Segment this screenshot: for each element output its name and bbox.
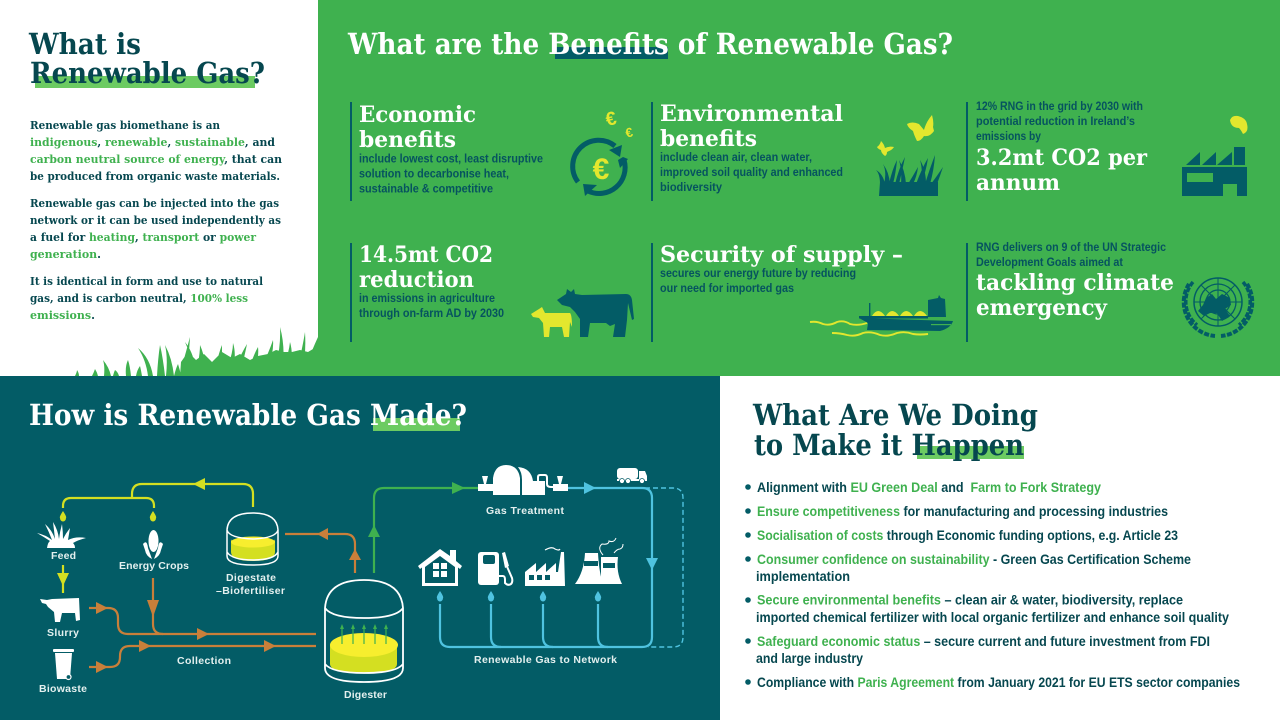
benefit: grid emissions: 12% RNG in the grid by 2030 with (976, 99, 1143, 113)
list: actions (745, 480, 1240, 690)
text block: definition: be produced from organic waste materials. (30, 169, 280, 183)
icon: euro cycle (573, 108, 634, 196)
text block: definition: generation. (30, 247, 101, 261)
list: actions: Safeguard economic status – secure current and future investment from FDI (757, 634, 1210, 649)
heading: what is renewable gas (28, 27, 265, 90)
icon: slurry cow (40, 598, 80, 622)
label: collection: Collection (177, 655, 231, 667)
icon: fuel pump (478, 552, 512, 585)
benefit: economic (350, 102, 543, 201)
icon: digestate tank (227, 513, 278, 565)
icon: grass (75, 327, 318, 376)
text block: definition: gas, and is carbon neutral, 100% less (30, 291, 248, 305)
label: slurry: Slurry (47, 627, 79, 639)
list: actions: Socialisation of costs through Economic funding options, e.g. Article 23 (757, 528, 1178, 543)
text block: definition: indigenous, renewable, sustainable, and (30, 135, 275, 149)
arrows: blue renewable gas network (437, 482, 683, 647)
icon: euro cycle: € (624, 124, 634, 141)
benefit: security of supply: Security of supply – (660, 242, 903, 268)
icon: house (418, 549, 462, 586)
icon: gas tanker truck (617, 468, 647, 484)
benefit: climate emergency: Development Goals aimed at (976, 255, 1123, 269)
label: digester: Digester (344, 689, 387, 701)
label: digestate biofertiliser: Digestate (226, 572, 276, 584)
heading: benefits: What are the Benefits of Renewable Gas? (347, 27, 953, 61)
panel: what are we doing (745, 398, 1240, 690)
benefit: agriculture reduction: in emissions in agriculture (359, 291, 495, 305)
list: actions: Compliance with Paris Agreement from January 2021 for EU ETS sector companies (757, 675, 1240, 690)
label: digestate biofertiliser (216, 572, 285, 597)
icon: feed grass (37, 522, 86, 548)
list: actions: Ensure competitiveness for manufacturing and processing industries (757, 504, 1168, 519)
benefit: economic: Economic (359, 102, 476, 128)
benefit: climate emergency: emergency (976, 295, 1108, 321)
benefit: economic: solution to decarbonise heat, (359, 166, 509, 180)
list: actions: and large industry (756, 651, 863, 666)
text block: definition: network or it can be used independently as (30, 213, 281, 227)
benefit: agriculture reduction: reduction (359, 267, 474, 293)
arrows: orange collection (89, 528, 361, 673)
benefit: agriculture reduction: through on-farm AD by 2030 (359, 306, 504, 320)
label: energy crops: Energy Crops (119, 560, 189, 572)
panel: benefits (318, 0, 1280, 376)
icon: digester (325, 580, 403, 682)
list: actions: Alignment with EU Green Deal and Farm to Fork Strategy (757, 480, 1101, 495)
benefit: climate emergency: RNG delivers on 9 of the UN Strategic (976, 240, 1166, 254)
benefit: agriculture reduction: 14.5mt CO2 (359, 242, 493, 268)
label: gas treatment: Gas Treatment (486, 505, 564, 517)
icon: euro cycle: € (593, 153, 610, 186)
panel: how is renewable gas made (0, 376, 720, 720)
text block: definition: emissions. (30, 308, 95, 322)
icon: power station (575, 538, 623, 584)
icon: biowaste bin (53, 649, 74, 680)
arrow: green gas to treatment (368, 482, 478, 573)
benefit: environmental: improved soil quality and enhanced (660, 165, 843, 179)
text block: definition (30, 118, 283, 322)
benefit: grid emissions: potential reduction in Ireland’s (976, 114, 1135, 128)
icon: gas tanker ship (810, 295, 953, 336)
heading: what is renewable gas: Renewable Gas? (30, 56, 265, 90)
list: actions: implementation (756, 569, 850, 584)
text block: definition: Renewable gas can be injected into the gas (30, 196, 279, 210)
icon: UN emblem (1184, 278, 1252, 336)
benefit: security of supply: our need for imported gas (660, 281, 794, 295)
benefit: environmental (651, 101, 843, 201)
icon: grass and butterflies (876, 115, 943, 196)
benefit: economic: benefits (359, 127, 456, 153)
heading: what is renewable gas: What is (28, 27, 141, 61)
benefit: climate emergency: tackling climate (976, 270, 1174, 296)
panel: what is renewable gas (0, 0, 319, 377)
benefit: security of supply: secures our energy future by reducing (660, 266, 856, 280)
text block: definition: a fuel for heating, transport or power (30, 230, 257, 244)
benefit: climate emergency (966, 240, 1174, 342)
benefit: grid emissions: 3.2mt CO2 per (976, 145, 1148, 171)
list: actions: Consumer confidence on sustainability - Green Gas Certification Scheme (757, 552, 1191, 567)
label: feed: Feed (51, 550, 76, 562)
list: actions: Secure environmental benefits – clean air & water, biodiversity, replace (757, 592, 1183, 608)
icon: factory white (525, 548, 565, 586)
heading: how is renewable gas made: How is Renewable Gas Made? (29, 398, 467, 432)
icon: factory (1182, 116, 1248, 196)
text block: definition: carbon neutral source of energy, that can (30, 152, 283, 166)
benefit: economic: sustainable & competitive (359, 182, 493, 196)
icon: euro cycle: € (604, 108, 619, 131)
benefit: grid emissions: emissions by (976, 129, 1041, 143)
heading: what are we doing: to Make it Happen (754, 428, 1024, 462)
benefit: economic: include lowest cost, least disruptive (359, 152, 543, 166)
label: digestate biofertiliser: –Biofertiliser (216, 585, 285, 597)
icon: energy crops corn (143, 530, 163, 559)
benefit: environmental: benefits (660, 126, 757, 152)
benefit: security of supply (651, 242, 903, 342)
benefit: environmental: Environmental (660, 101, 843, 127)
icon: gas treatment plant (478, 465, 568, 495)
benefit: environmental: biodiversity (660, 180, 722, 194)
benefit: grid emissions: annum (976, 170, 1060, 196)
benefit: environmental: include clean air, clean water, (660, 150, 812, 164)
text block: definition: It is identical in form and use to natural (30, 274, 264, 288)
icon: cow and calf (531, 289, 634, 337)
label: biowaste: Biowaste (39, 683, 87, 695)
list: actions: imported chemical fertilizer with local organic fertilizer and enhance soil quality (756, 610, 1229, 625)
heading: what are we doing (752, 398, 1038, 462)
text block: definition: Renewable gas biomethane is an (30, 118, 221, 132)
benefit: agriculture reduction (350, 242, 504, 342)
heading: what are we doing: What Are We Doing (752, 398, 1038, 432)
label: renewable gas to network: Renewable Gas to Network (474, 654, 617, 666)
benefit: grid emissions (966, 99, 1148, 201)
arrows: lime biofertiliser return (57, 478, 253, 593)
